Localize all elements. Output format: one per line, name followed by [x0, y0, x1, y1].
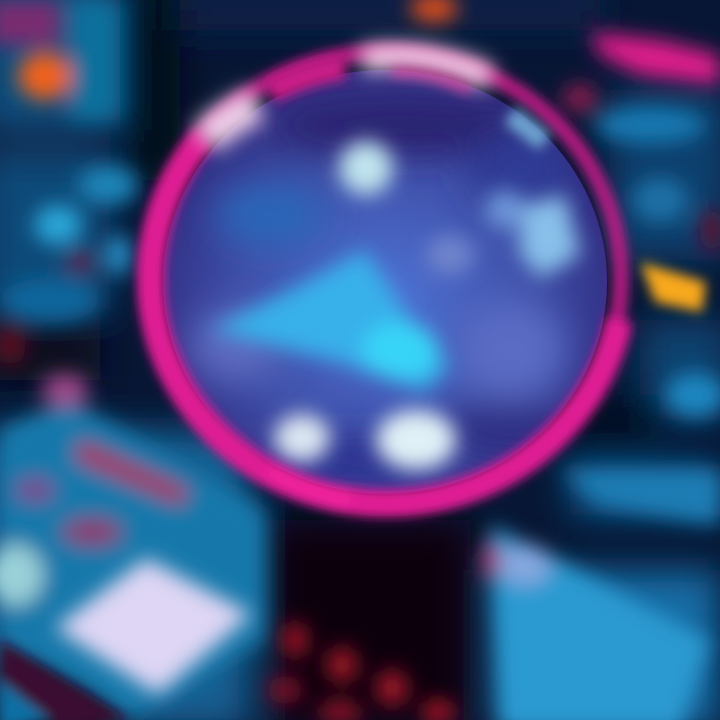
- panel: bottom right sheet: [480, 525, 710, 720]
- bars: top panel highlights: [410, 0, 720, 143]
- icon: magnifier joint orange accent: [640, 262, 706, 312]
- ring: brighter left and lower rim: [151, 135, 620, 503]
- lens contents: [190, 95, 580, 482]
- ring: magenta accents on top rim: [270, 68, 545, 142]
- icon: pale dot top: [339, 141, 393, 195]
- chart: central cyan peak: [210, 250, 450, 392]
- panel: bottom left data sheet: [0, 374, 265, 720]
- tiles: left side blue cells: [0, 165, 138, 365]
- stroke: dark diagonal edge: [0, 640, 130, 720]
- icon: orange spot top left: [0, 0, 120, 120]
- lens glass: [163, 70, 607, 494]
- bars: right pale streaks: [426, 190, 580, 278]
- icon: magnifier lens: [149, 52, 621, 504]
- ring: pale highlights on top rim: [205, 57, 490, 140]
- icons: pale lower dots: [274, 410, 456, 470]
- ring: magenta rim: [149, 52, 621, 504]
- icon: magnifier handle with red dots: [267, 622, 454, 720]
- bars: right side panel: [560, 178, 720, 525]
- card: pale lilac sheet: [55, 558, 252, 695]
